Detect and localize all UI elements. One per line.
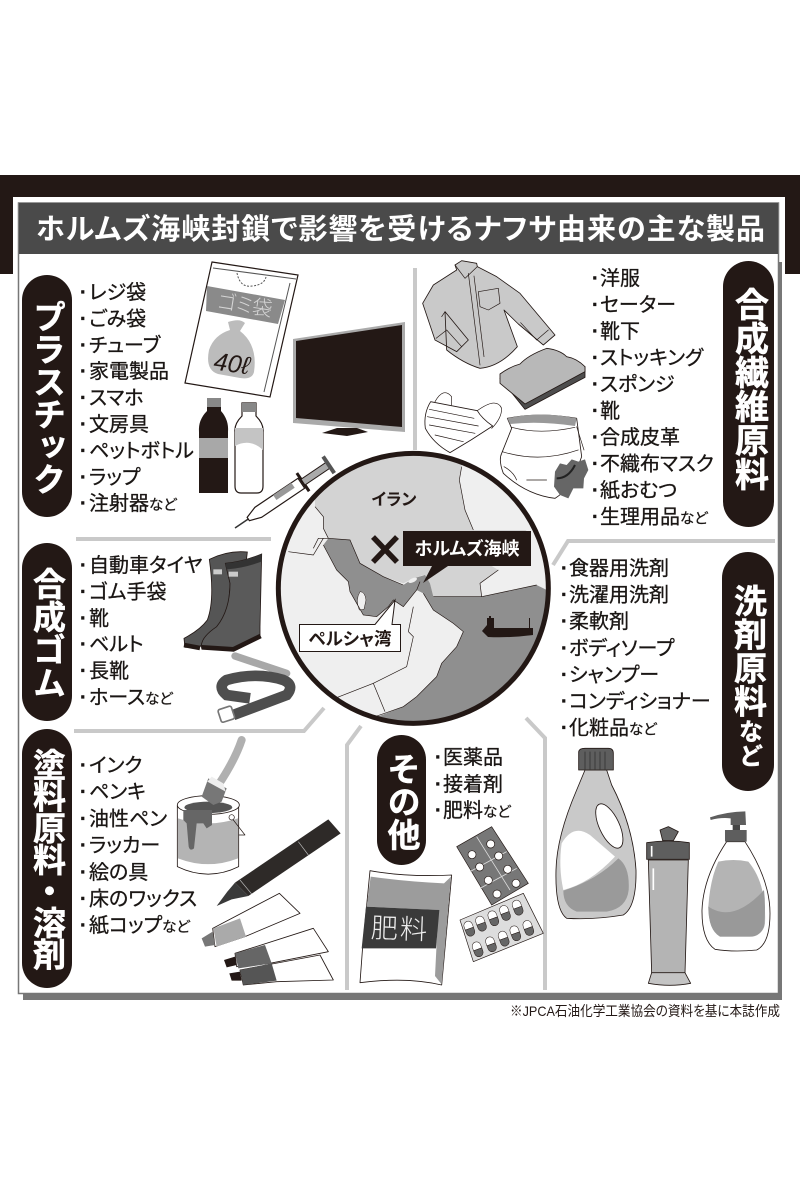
paint item list: 油性ペン — [89, 807, 167, 830]
rubber item list: ベルト — [89, 634, 143, 656]
icon: sponge — [500, 348, 585, 409]
rubber pill heading: 合成ゴム — [28, 567, 66, 699]
plastic item list: · — [80, 361, 87, 383]
paint item list: ペンキ — [89, 782, 146, 804]
detergent item list — [561, 557, 711, 740]
detergent item list: · — [561, 718, 568, 740]
detergent item list: など — [629, 722, 658, 739]
icon: detergent bottle — [556, 748, 636, 919]
plastic item list: · — [80, 414, 87, 436]
paint item list — [80, 754, 197, 937]
others item list: 医薬品 — [443, 746, 503, 769]
callout: Strait of Hormuz — [403, 531, 531, 583]
map: Iran — [315, 447, 527, 597]
synthetic fibre item list: 靴 — [600, 400, 620, 422]
icon: diaper — [500, 414, 588, 498]
plastic pill heading — [22, 275, 72, 517]
icon: mask — [425, 393, 502, 453]
map: sea — [324, 538, 546, 721]
synthetic fibre item list: セーター — [600, 294, 676, 316]
plastic item list: ラップ — [89, 467, 141, 489]
paint item list: · — [80, 835, 87, 857]
synthetic fibre item list: · — [592, 268, 599, 290]
detergent item list: · — [561, 664, 568, 686]
icon: fertilizer bag: 肥料 — [370, 912, 430, 945]
synthetic fibre item list: 洋服 — [600, 267, 640, 290]
detergent item list: 食器用洗剤 — [569, 557, 669, 580]
plastic item list: レジ袋 — [89, 281, 146, 304]
icon: shirt — [423, 261, 555, 368]
synthetic fibre item list: 生理用品 — [600, 506, 680, 528]
synthetic fibre item list: 紙おむつ — [600, 479, 677, 502]
icon: paint tubes — [202, 893, 333, 985]
plastic item list: · — [80, 282, 87, 304]
rubber item list: · — [80, 581, 87, 603]
icon: capsule blister pack — [460, 893, 543, 962]
paint item list: ラッカー — [89, 835, 160, 857]
plastic item list — [80, 281, 194, 515]
others item list: など — [483, 804, 512, 821]
paint item list: など — [162, 919, 191, 936]
detergent item list: 化粧品 — [569, 717, 629, 740]
rubber item list: · — [80, 608, 87, 630]
paint item list: · — [80, 862, 87, 884]
title bar — [19, 203, 778, 254]
plastic item list: スマホ — [89, 388, 144, 410]
plastic item list: チューブ — [89, 333, 161, 357]
others item list: · — [435, 800, 442, 822]
paint pill heading: 塗料原料・溶剤 — [28, 748, 66, 971]
synthetic fibre item list: · — [592, 480, 599, 502]
title bar: ホルムズ海峡封鎖で影響を受けるナフサ由来の主な製品 — [36, 212, 765, 246]
plastic item list: など — [149, 497, 178, 514]
callout: Persian Gulf: ペルシャ湾 — [308, 629, 392, 649]
synthetic fibre item list — [592, 267, 714, 528]
icon: garbage bag package — [185, 262, 298, 397]
panel: others — [360, 735, 543, 985]
detergent item list: · — [561, 558, 568, 580]
rubber item list: · — [80, 634, 87, 656]
plastic item list: 注射器 — [89, 492, 149, 515]
label: Iran: イラン — [372, 491, 417, 509]
icon: PET bottles — [199, 398, 263, 493]
rubber item list: · — [80, 661, 87, 683]
plastic item list: ごみ袋 — [89, 307, 146, 330]
icon: slim bottle — [647, 827, 691, 985]
plastic item list: · — [80, 335, 87, 357]
plastic item list: 文房具 — [89, 413, 149, 436]
others pill heading: その他 — [383, 752, 420, 851]
paint item list: · — [80, 808, 87, 830]
main panel — [18, 203, 782, 1000]
panel: plastic — [22, 262, 405, 537]
others item list: · — [435, 774, 442, 796]
synthetic fibre item list: · — [592, 348, 599, 370]
rubber pill heading — [22, 543, 72, 721]
detergent item list: コンディショナー — [569, 690, 711, 713]
icon: paint can and brush — [177, 740, 245, 874]
rubber item list: · — [80, 687, 87, 709]
black top frame — [0, 175, 800, 274]
icon: fertilizer bag — [360, 871, 452, 985]
rubber item list: ホース — [89, 687, 145, 709]
paint item list: · — [80, 782, 87, 804]
paint item list: 床のワックス — [89, 888, 197, 910]
detergent item list: 柔軟剤 — [569, 610, 629, 633]
detergent pill heading: など — [734, 719, 762, 768]
rubber item list — [80, 554, 202, 709]
rubber item list: ゴム手袋 — [89, 580, 166, 603]
rubber item list: 長靴 — [89, 660, 129, 683]
others pill heading — [377, 735, 426, 865]
detergent pill heading — [722, 552, 774, 791]
plastic pill heading: プラスチック — [28, 300, 66, 495]
synthetic fibre item list: 不織布マスク — [600, 452, 714, 476]
detergent item list: シャンプー — [569, 664, 659, 686]
paint item list: · — [80, 755, 87, 777]
icon: cross mark at strait — [373, 537, 397, 562]
synthetic fibre item list: · — [592, 400, 599, 422]
plastic item list: · — [80, 308, 87, 330]
paint item list: · — [80, 888, 87, 910]
detergent item list: · — [561, 585, 568, 607]
callout: Persian Gulf — [300, 600, 400, 652]
synthetic fibre item list: · — [592, 321, 599, 343]
others item list: 接着剤 — [443, 773, 503, 796]
synthetic fibre item list: · — [592, 506, 599, 528]
synthetic fibre item list: · — [592, 427, 599, 449]
panel: detergent — [556, 552, 774, 985]
paint pill heading — [22, 729, 72, 988]
panel: synthetic fibre — [423, 261, 774, 528]
paint item list: 紙コップ — [89, 914, 163, 937]
icon: rubber boots — [184, 552, 262, 650]
plastic item list: 家電製品 — [89, 360, 169, 383]
synthetic fibre item list: · — [592, 294, 599, 316]
others item list — [435, 746, 512, 822]
synthetic fibre item list: ストッキング — [600, 346, 705, 370]
detergent item list: · — [561, 611, 568, 633]
paint item list: · — [80, 915, 87, 937]
synthetic fibre item list: など — [680, 510, 709, 528]
rubber item list: · — [80, 555, 87, 577]
icon: tanker ship — [482, 616, 533, 637]
icon: television — [293, 322, 405, 436]
icon: belt — [218, 656, 290, 723]
others item list: · — [435, 747, 442, 769]
paint item list: 絵の具 — [89, 861, 148, 884]
callout: Strait of Hormuz: ホルムズ海峡 — [414, 538, 520, 559]
synthetic fibre item list: 合成皮革 — [600, 426, 680, 449]
panel: synthetic rubber — [22, 543, 290, 723]
panel: paint and solvents — [22, 729, 341, 988]
icon: tablet blister pack — [457, 827, 528, 905]
rubber item list: 靴 — [89, 607, 109, 630]
icon: garbage bag package: 40ℓ — [212, 348, 252, 380]
rubber item list: 自動車タイヤ — [89, 554, 202, 577]
plastic item list: · — [80, 440, 87, 462]
icon: garbage bag package: ゴミ袋 — [216, 290, 274, 321]
rubber item list: など — [145, 691, 174, 708]
icon: pump bottle — [702, 811, 770, 951]
synthetic fibre item list: · — [592, 454, 599, 476]
detergent pill heading: 洗剤原料 — [730, 584, 766, 718]
plastic item list: · — [80, 388, 87, 410]
plastic item list: ペットボトル — [89, 439, 194, 462]
synthetic fibre item list: · — [592, 374, 599, 396]
icon: syringe — [229, 456, 335, 537]
icon: marker pen — [217, 819, 341, 906]
plastic item list: · — [80, 493, 87, 515]
detergent item list: 洗濯用洗剤 — [569, 584, 669, 607]
paint item list: インク — [89, 754, 142, 777]
map: Strait of Hormuz — [276, 450, 551, 726]
plastic item list: · — [80, 467, 87, 489]
detergent item list: ボディソープ — [569, 637, 675, 660]
others item list: 肥料 — [443, 799, 483, 822]
synthetic fibre item list: 靴下 — [600, 320, 640, 343]
synthetic fibre pill heading — [723, 261, 774, 527]
detergent item list: · — [561, 691, 568, 713]
synthetic fibre pill heading: 合成繊維原料 — [730, 287, 768, 491]
detergent item list: · — [561, 638, 568, 660]
synthetic fibre item list: スポンジ — [600, 373, 675, 396]
